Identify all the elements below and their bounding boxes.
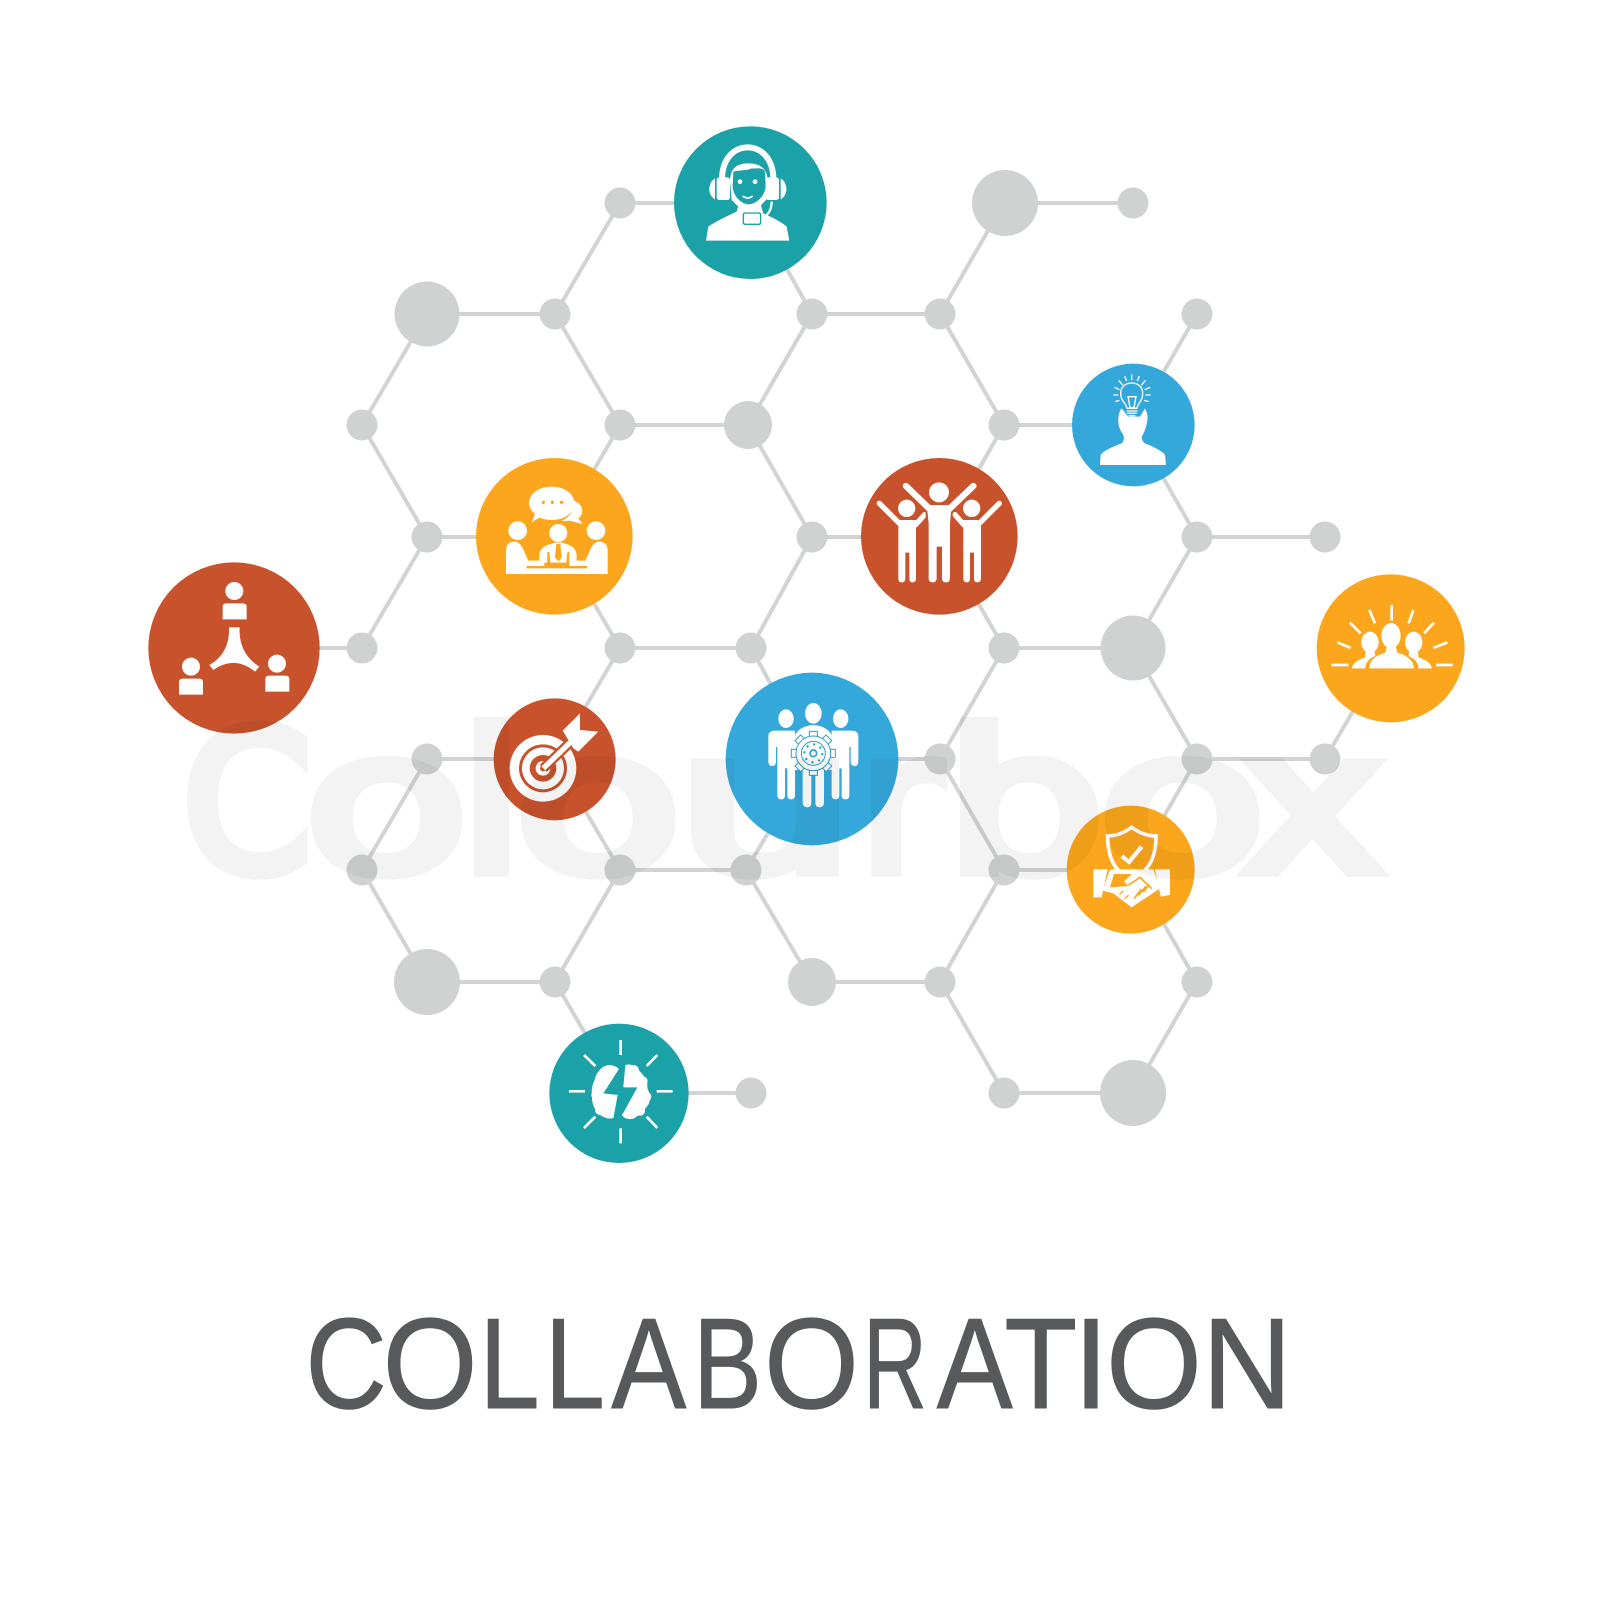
title: A	[611, 1292, 686, 1436]
watermark: u	[676, 690, 856, 917]
icon: person with lightbulb idea	[1072, 364, 1195, 486]
icon: team around a gear	[726, 673, 898, 845]
title: C	[305, 1292, 387, 1436]
title: I	[1073, 1292, 1109, 1436]
title: O	[1106, 1292, 1202, 1436]
title: L	[545, 1292, 605, 1436]
icon: target with arrow	[494, 698, 616, 820]
connector lines	[234, 203, 1390, 1093]
icon: shield and handshake	[1067, 806, 1195, 934]
icon: three people with rays	[1317, 574, 1465, 722]
watermark: b	[945, 690, 1105, 917]
title: A	[937, 1292, 1013, 1436]
network nodes	[346, 170, 1340, 1126]
panel: hexagon network	[234, 170, 1390, 1126]
watermark: o	[304, 690, 469, 917]
watermark: r	[859, 690, 942, 917]
icon: three connected people	[148, 562, 320, 734]
title: O	[383, 1292, 478, 1436]
icon: support agent with headset	[674, 126, 827, 279]
title: R	[863, 1292, 927, 1436]
icon: cheering group of three people	[861, 458, 1018, 615]
watermark: o	[514, 690, 682, 917]
title: T	[1004, 1292, 1077, 1436]
title: O	[764, 1292, 859, 1436]
title: B	[693, 1292, 762, 1436]
icon: brain with lightning bolt	[549, 1024, 689, 1163]
watermark: x	[1242, 690, 1384, 917]
watermark: l	[459, 690, 524, 917]
icon: team meeting with speech bubbles	[476, 458, 633, 615]
watermark: C	[183, 690, 312, 917]
watermark: o	[1098, 690, 1266, 917]
title: L	[479, 1292, 540, 1436]
title: N	[1202, 1292, 1292, 1436]
